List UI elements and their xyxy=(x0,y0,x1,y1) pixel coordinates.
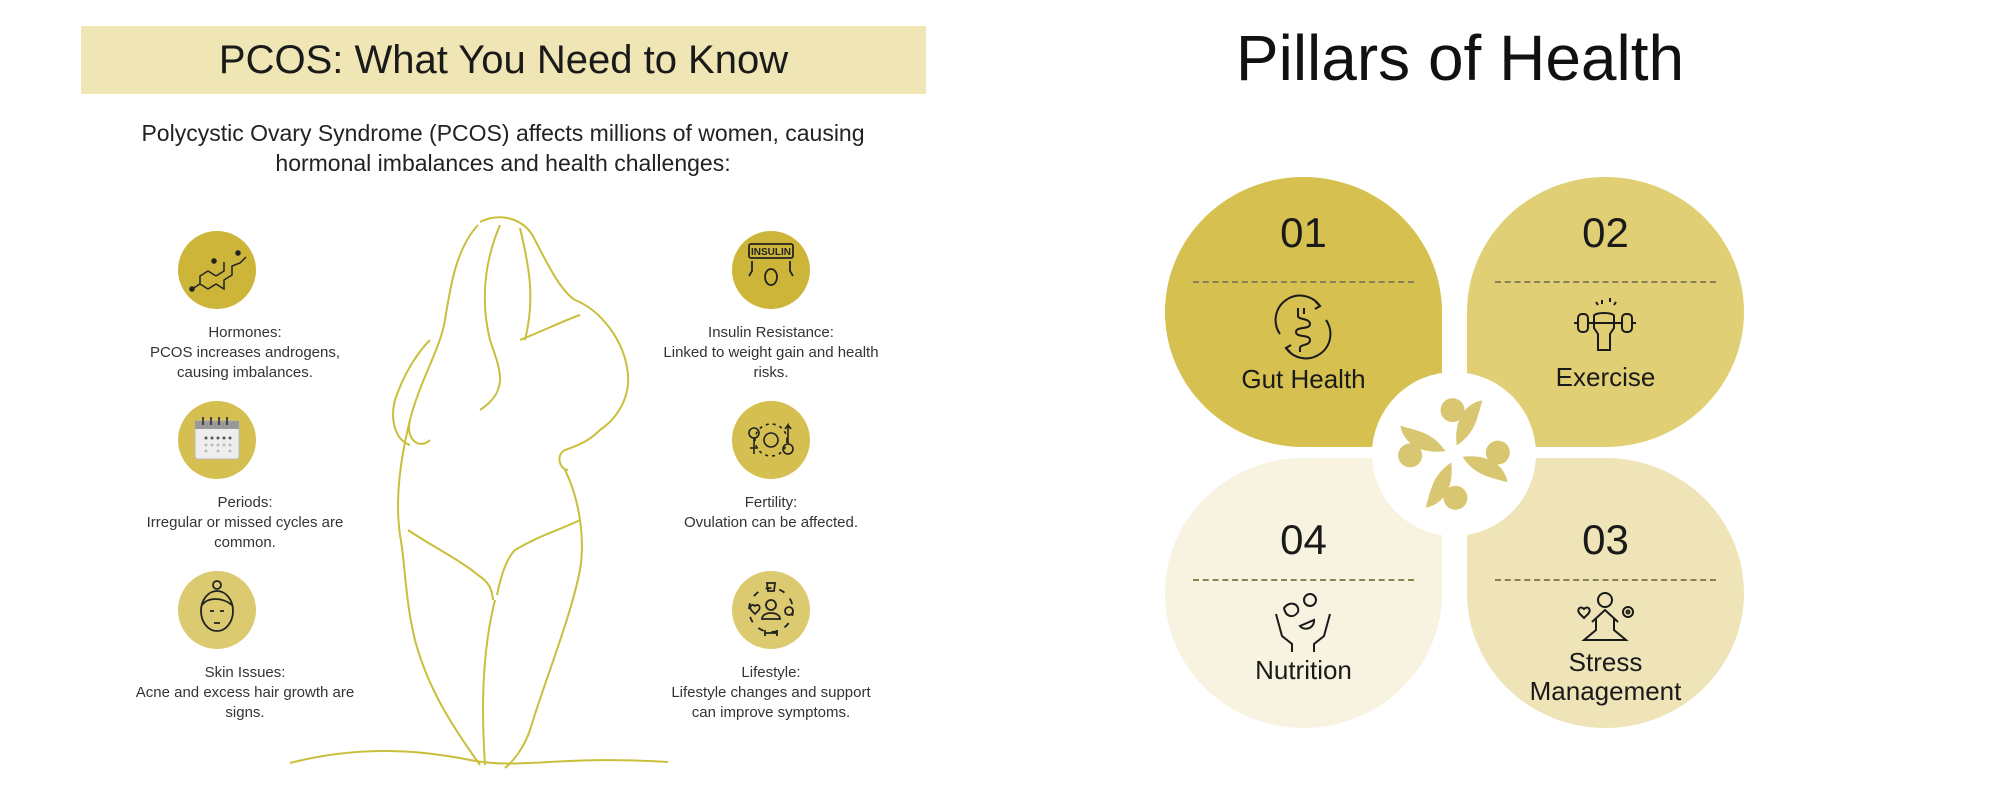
text: lifestyle: Lifestyle: xyxy=(741,664,801,681)
item: skin xyxy=(136,571,354,721)
panel: 03 stress management: Management xyxy=(1530,676,1681,706)
panel: 04 nutrition: 04 xyxy=(1280,516,1327,563)
text: hormones xyxy=(150,324,340,381)
text: skin: signs. xyxy=(225,704,265,721)
panel: 03 stress management: Stress xyxy=(1569,647,1642,677)
text: periods xyxy=(147,494,343,551)
panel: 02 exercise: 02 xyxy=(1582,209,1629,256)
text: periods: common. xyxy=(214,534,276,551)
text: hormones: Hormones: xyxy=(208,324,282,341)
icon: lifestyle xyxy=(732,571,810,649)
center logo xyxy=(1372,372,1536,536)
text: insulin: Linked to weight gain and health xyxy=(663,344,879,361)
text: fertility: Fertility: xyxy=(745,494,797,511)
item: lifestyle xyxy=(671,571,871,721)
item: insulin xyxy=(663,231,879,381)
title: pillars of health: Pillars of Health xyxy=(1236,22,1684,94)
item: fertility xyxy=(684,401,858,531)
icon: insulin xyxy=(732,231,810,309)
text: fertility xyxy=(684,494,858,531)
panel: 02 exercise: Exercise xyxy=(1556,362,1655,392)
text: skin: Skin Issues: xyxy=(205,664,285,681)
panel: 01 gut health xyxy=(1165,177,1442,447)
text: periods: Irregular or missed cycles are xyxy=(147,514,343,531)
item: hormones xyxy=(150,231,340,381)
text: hormones: causing imbalances. xyxy=(177,364,313,381)
text: fertility: Ovulation can be affected. xyxy=(684,514,858,531)
text: lifestyle xyxy=(671,664,871,721)
icon: fertility xyxy=(732,401,810,479)
intro text: hormonal imbalances and health challenges: xyxy=(275,150,731,176)
panel: 04 nutrition xyxy=(1165,458,1442,728)
icon: hands with food xyxy=(1275,593,1331,652)
panel: 03 stress management: 03 xyxy=(1582,516,1629,563)
icon: face xyxy=(178,571,256,649)
title band xyxy=(81,26,926,94)
icon: meditation xyxy=(1577,592,1634,641)
panel: 01 gut health: 01 xyxy=(1280,209,1327,256)
text: lifestyle: can improve symptoms. xyxy=(692,704,850,721)
title band: PCOS: What You Need to Know xyxy=(219,38,788,82)
text: insulin: risks. xyxy=(754,364,788,381)
text: lifestyle: Lifestyle changes and support xyxy=(671,684,871,701)
panel: 01 gut health: Gut Health xyxy=(1241,364,1366,394)
text: insulin xyxy=(663,324,879,381)
text: periods: Periods: xyxy=(217,494,273,511)
icon: molecule xyxy=(178,231,256,309)
panel: 03 stress management xyxy=(1467,458,1744,728)
figure: woman line drawing xyxy=(290,216,668,769)
icon: gut xyxy=(1274,294,1332,360)
text: skin: Acne and excess hair growth are xyxy=(136,684,354,701)
icon: dumbbell fist xyxy=(1574,298,1636,351)
item: periods xyxy=(147,401,343,551)
intro text: Polycystic Ovary Syndrome (PCOS) affects millions of women, causing xyxy=(141,120,865,146)
text: skin xyxy=(136,664,354,721)
intro text xyxy=(141,120,865,176)
text: insulin: Insulin Resistance: xyxy=(708,324,834,341)
panel: 04 nutrition: Nutrition xyxy=(1255,655,1352,685)
panel: 02 exercise xyxy=(1467,177,1744,447)
icon: calendar xyxy=(178,401,256,479)
icon: insulin: INSULIN xyxy=(751,247,791,258)
text: hormones: PCOS increases androgens, xyxy=(150,344,340,361)
